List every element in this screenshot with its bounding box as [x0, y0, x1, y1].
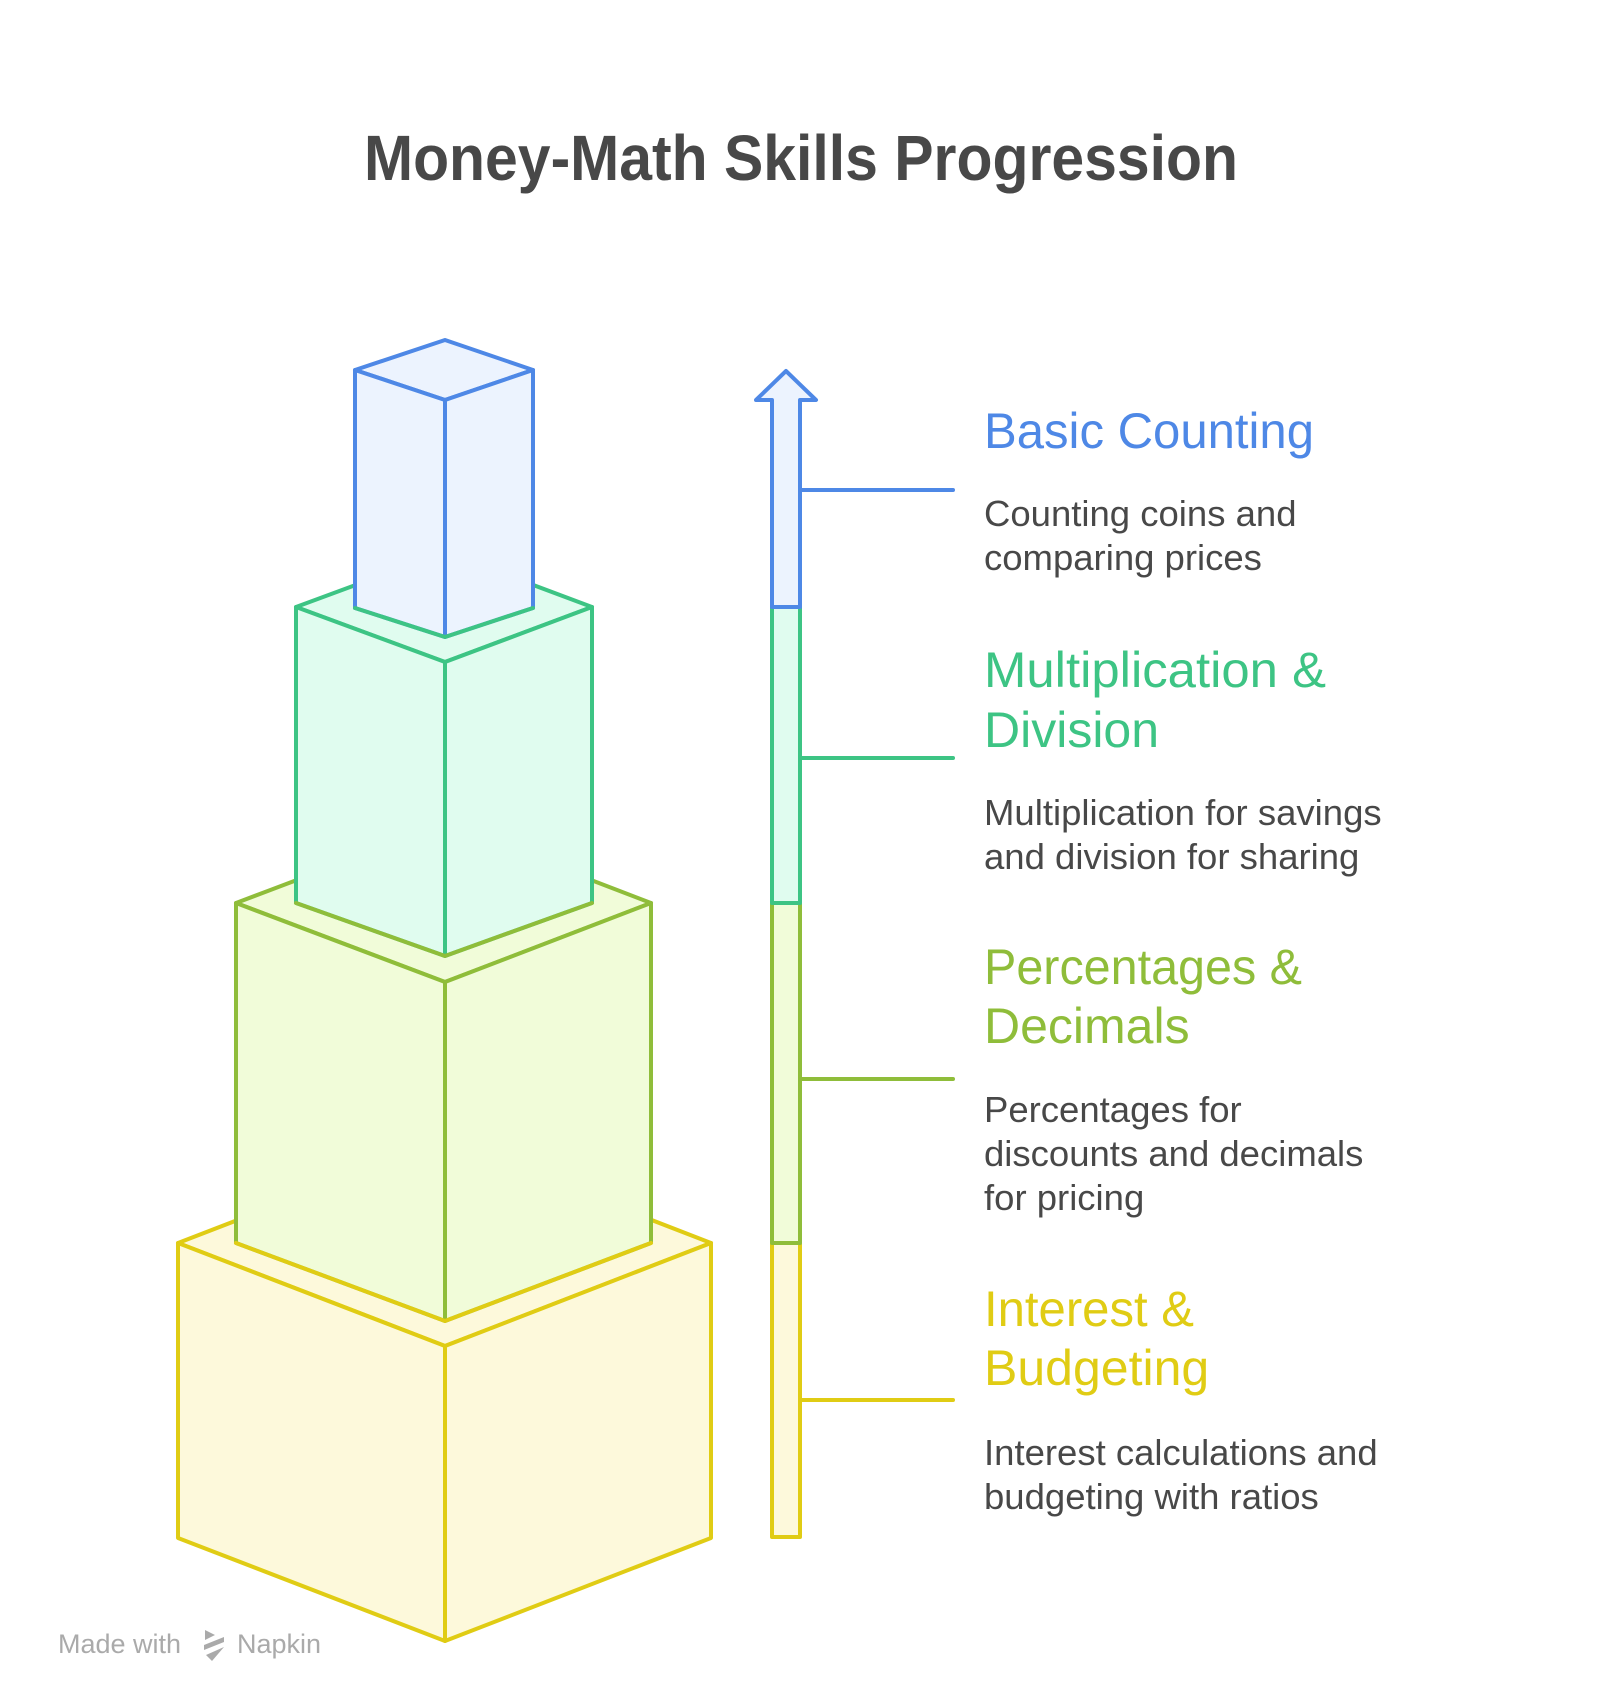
text block: interest & budgeting: Interest calculations and — [984, 1432, 1378, 1473]
text block: percentages & decimals: for pricing — [984, 1177, 1144, 1218]
text block: multiplication & division: Multiplication & — [984, 642, 1326, 698]
text block: basic counting: Counting coins and — [984, 493, 1296, 534]
arrow segment: yellow-green — [772, 903, 800, 1243]
cube: percentages & decimals — [236, 824, 651, 1321]
icon: napkin logo — [204, 1630, 224, 1661]
text block: basic counting: comparing prices — [984, 537, 1262, 578]
text block: basic counting: Basic Counting — [984, 403, 1314, 459]
text block: interest & budgeting: Budgeting — [984, 1340, 1209, 1396]
progression arrow — [756, 371, 816, 1537]
cube: basic counting (top) — [355, 340, 533, 637]
watermark: Made with — [58, 1629, 181, 1659]
text block: percentages & decimals: Percentages & — [984, 939, 1302, 995]
arrow segment: green — [772, 607, 800, 903]
text block: multiplication & division: Division — [984, 702, 1159, 758]
text block: percentages & decimals: Decimals — [984, 998, 1190, 1054]
title: Money-Math Skills Progression — [364, 122, 1238, 194]
text block: percentages & decimals: discounts and decimals — [984, 1133, 1363, 1174]
text block: multiplication & division: and division for sharing — [984, 836, 1359, 877]
text block: basic counting — [984, 403, 1314, 578]
text block: interest & budgeting — [984, 1281, 1378, 1517]
watermark: Napkin — [237, 1629, 321, 1659]
arrow head: blue — [756, 371, 816, 607]
text block: percentages & decimals — [984, 939, 1363, 1218]
text block: multiplication & division — [984, 642, 1382, 877]
text block: percentages & decimals: Percentages for — [984, 1089, 1242, 1130]
text block: multiplication & division: Multiplication for savings — [984, 792, 1382, 833]
cube: interest & budgeting (bottom) — [178, 1140, 711, 1641]
connector lines — [800, 490, 953, 1400]
arrow segment: yellow — [772, 1243, 800, 1537]
text block: interest & budgeting: budgeting with ratios — [984, 1476, 1319, 1517]
watermark — [58, 1629, 321, 1661]
cube: multiplication & division — [296, 552, 592, 956]
text block: interest & budgeting: Interest & — [984, 1281, 1194, 1337]
stacked cubes — [178, 340, 711, 1641]
